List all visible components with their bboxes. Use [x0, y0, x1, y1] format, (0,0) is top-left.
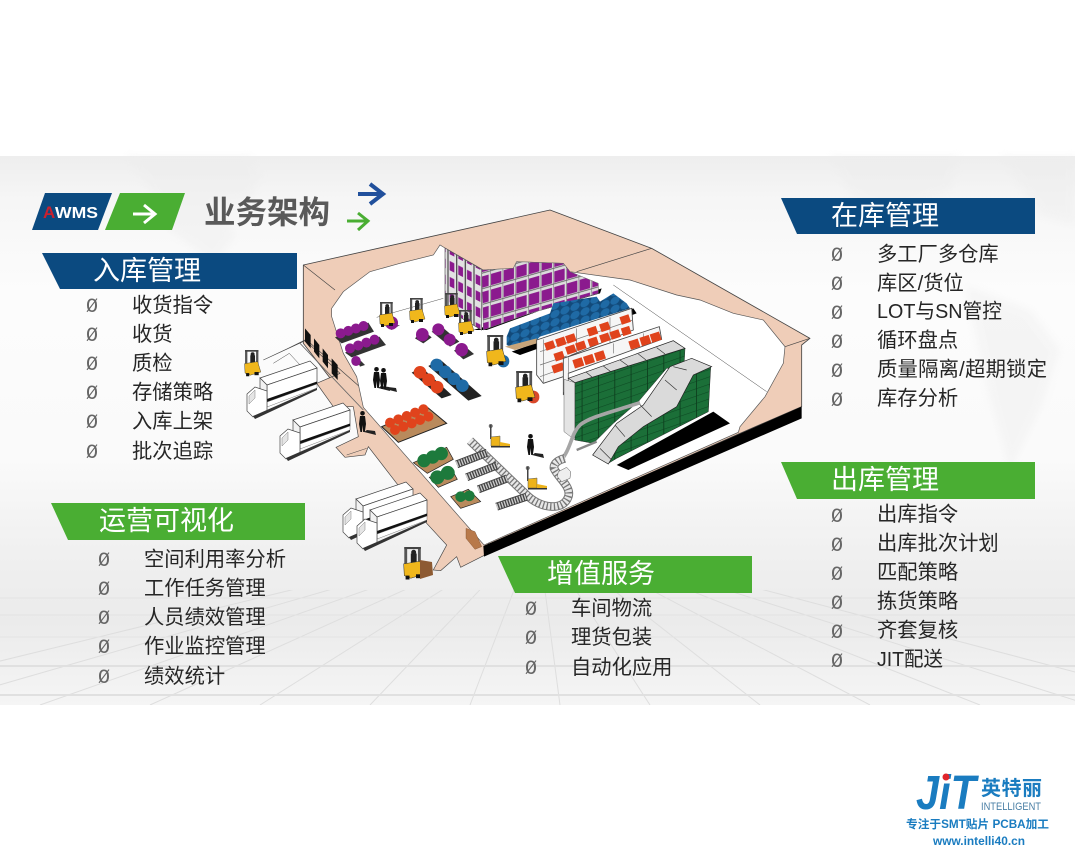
panel: 出库管理	[781, 462, 1035, 674]
panel: 增值服务	[498, 556, 752, 681]
list: 拣货策略	[877, 590, 958, 613]
heading	[781, 198, 1035, 234]
heading: 运营可视化	[99, 506, 234, 536]
list: 收货指令	[132, 294, 213, 317]
list: 批次追踪	[132, 440, 213, 463]
heading: 入库管理	[93, 256, 201, 286]
list: 绩效统计	[144, 665, 225, 688]
title: 业务架构	[204, 194, 330, 230]
list: Ø	[831, 622, 843, 645]
list: 库区/货位	[877, 272, 964, 295]
green pallets	[413, 447, 481, 508]
orange and blue floor pallets	[382, 359, 533, 442]
list: Ø	[525, 658, 537, 681]
flexible tube	[558, 403, 640, 463]
list: 工作任务管理	[144, 577, 266, 600]
list: Ø	[86, 412, 98, 435]
list: 存储策略	[132, 381, 213, 404]
list	[98, 548, 286, 690]
list: Ø	[98, 667, 110, 690]
list: Ø	[86, 296, 98, 319]
heading: 出库管理	[831, 465, 939, 495]
list: Ø	[831, 506, 843, 529]
blue racks	[505, 293, 637, 355]
list: Ø	[831, 651, 843, 674]
list: Ø	[98, 608, 110, 631]
list	[831, 243, 1047, 413]
roller conveyor	[457, 441, 569, 507]
list	[831, 503, 999, 674]
loading docks	[263, 340, 488, 571]
list: 循环盘点	[877, 329, 958, 352]
brown cartons	[466, 528, 482, 549]
list: 理货包装	[571, 626, 652, 649]
heading: 增值服务	[547, 559, 655, 589]
list: Ø	[98, 637, 110, 660]
list: Ø	[86, 442, 98, 465]
list: 齐套复核	[877, 619, 958, 642]
list: LOT与SN管控	[877, 300, 1002, 323]
dock doors	[305, 328, 338, 380]
background panel	[0, 156, 1075, 705]
list: 作业监控管理	[144, 635, 266, 658]
logo: JiT 英特丽: 专注于SMT贴片 PCBA加工	[906, 817, 1050, 831]
list: Ø	[86, 354, 98, 377]
list: 质检	[132, 352, 173, 375]
icon: green arrow	[347, 213, 368, 230]
list: Ø	[831, 274, 843, 297]
building walls	[303, 210, 810, 547]
panel: 在库管理	[781, 198, 1047, 413]
orange racks	[537, 308, 662, 395]
list: Ø	[831, 390, 843, 413]
list: 入库上架	[132, 410, 213, 433]
list: Ø	[831, 535, 843, 558]
purple high rack	[445, 248, 602, 330]
heading: 在库管理	[831, 201, 939, 231]
list: 多工厂多仓库	[877, 243, 999, 266]
green storage blocks	[558, 341, 730, 470]
list: Ø	[98, 550, 110, 573]
workers	[359, 367, 544, 458]
forklifts	[245, 293, 535, 580]
warehouse illustration	[245, 210, 810, 580]
logo: JiT 英特丽: 英特丽	[981, 777, 1042, 800]
heading	[781, 462, 1035, 499]
heading	[498, 556, 752, 593]
list: Ø	[98, 579, 110, 602]
list: 匹配策略	[877, 561, 958, 584]
logo: JiT 英特丽	[906, 767, 1050, 848]
logo: JiT 英特丽: INTELLIGENT	[981, 801, 1041, 813]
list: Ø	[831, 593, 843, 616]
list: JIT配送	[877, 648, 943, 671]
list: 质量隔离/超期锁定	[877, 358, 1047, 381]
list: 人员绩效管理	[144, 606, 266, 629]
heading	[42, 253, 297, 289]
panel: 入库管理	[42, 253, 297, 465]
list: Ø	[831, 303, 843, 326]
list: Ø	[831, 332, 843, 355]
list	[86, 294, 213, 465]
list: 收货	[132, 323, 173, 346]
panel: 运营可视化	[51, 503, 305, 690]
icon: blue arrow	[358, 184, 383, 204]
purple pallets	[335, 323, 474, 367]
header badge: AWMS: WMS	[55, 205, 98, 222]
list: 出库指令	[877, 503, 958, 526]
list	[525, 597, 672, 681]
list: Ø	[831, 361, 843, 384]
list: Ø	[525, 628, 537, 651]
delivery trucks	[247, 361, 427, 551]
carton on dock forklift	[420, 560, 433, 579]
list: 出库批次计划	[877, 532, 999, 555]
list: 自动化应用	[571, 656, 672, 679]
list: Ø	[525, 599, 537, 622]
list: Ø	[86, 325, 98, 348]
heading	[51, 503, 305, 540]
logo: JiT 英特丽: JiT	[916, 767, 979, 820]
pallet jacks	[489, 424, 547, 490]
list: 车间物流	[571, 597, 652, 620]
warehouse floor	[300, 245, 802, 557]
list: Ø	[831, 564, 843, 587]
list: Ø	[831, 245, 843, 268]
header badge: AWMS	[32, 193, 112, 230]
list: 空间利用率分析	[144, 548, 286, 571]
list: 库存分析	[877, 387, 958, 410]
list: Ø	[86, 383, 98, 406]
header badge: AWMS: A	[43, 203, 55, 222]
header badge: green arrow	[105, 193, 185, 230]
logo: JiT 英特丽: www.intelli40.cn	[932, 834, 1025, 848]
